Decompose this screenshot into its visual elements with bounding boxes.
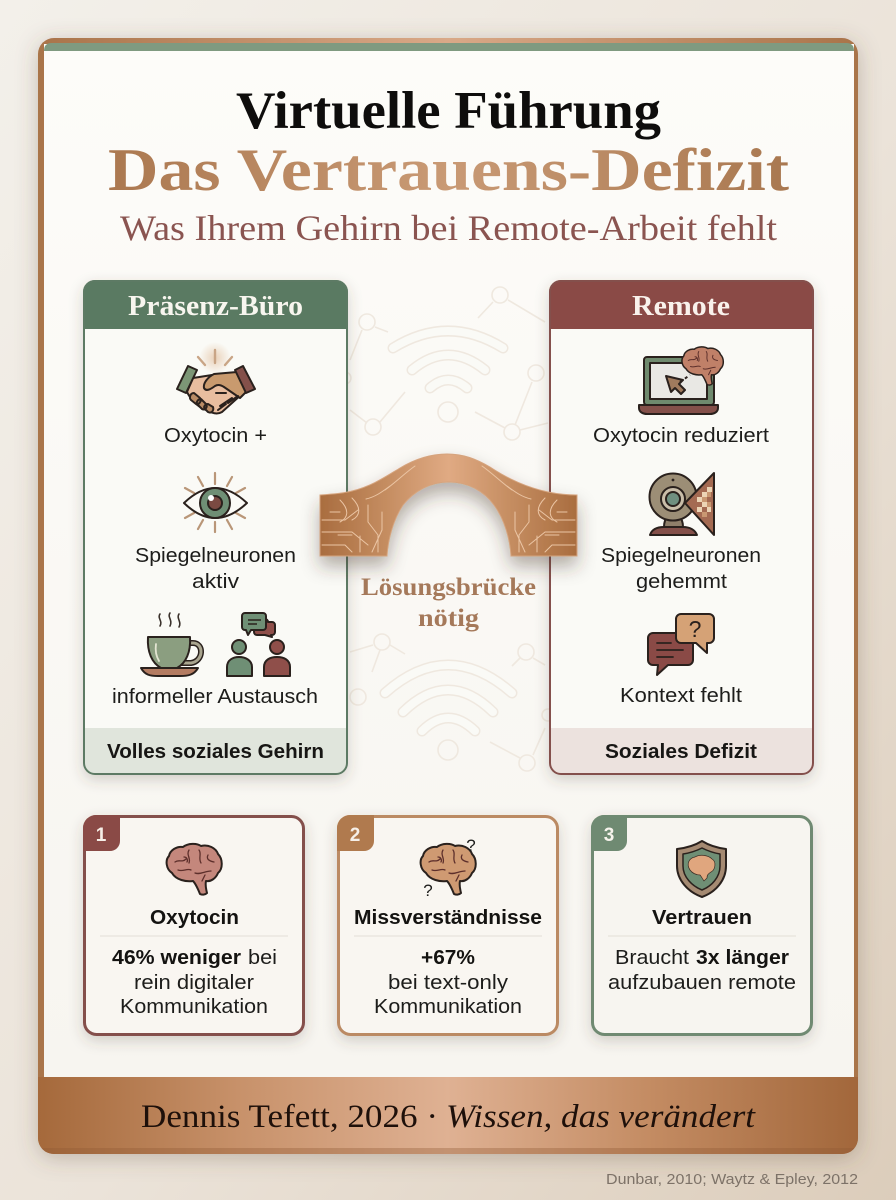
label: Oxytocin reduziert — [593, 424, 769, 447]
card title: Oxytocin — [150, 907, 239, 929]
label: Oxytocin + — [164, 424, 267, 447]
card 3: Vertrauen — [591, 815, 812, 1034]
label: Spiegelneuronen aktiv: Spiegelneuronen — [135, 544, 296, 567]
panel heading: Remote — [632, 291, 730, 322]
card text: Kommunikation — [120, 995, 268, 1018]
icon: copper bridge with circuit traces — [320, 454, 577, 556]
card text — [374, 947, 522, 1018]
icon: chat bubbles with question mark: ? — [689, 616, 701, 642]
icon: coffee cup — [141, 613, 201, 676]
card text: 3x länger — [696, 947, 789, 969]
label: Kontext fehlt — [620, 684, 742, 707]
title block — [108, 82, 789, 248]
footer text: Wissen, das verändert — [446, 1099, 756, 1135]
card title: Missverständnisse — [354, 907, 542, 929]
icon: brain with question marks: ? — [466, 836, 476, 855]
card text: bei text-only — [388, 971, 509, 994]
title line 2: Das Vertrauens-Defizit — [108, 137, 789, 203]
badge 1: 1 — [96, 825, 107, 846]
label: informeller Austausch — [112, 685, 318, 708]
icon: webcam with pixelated cone — [650, 473, 714, 535]
icon: two people talking — [227, 613, 290, 676]
card text: Kommunikation — [374, 995, 522, 1018]
card text: aufzubauen remote — [608, 971, 796, 994]
label: Lösungsbrücke nötig: Lösungsbrücke — [361, 574, 536, 601]
footer text: Dennis Tefett, 2026 · — [141, 1099, 438, 1135]
card text: +67% — [421, 947, 475, 969]
footer banner — [38, 1077, 858, 1154]
card text: rein digitaler — [134, 971, 254, 994]
badge 2 — [337, 815, 374, 851]
icon: eye — [184, 473, 247, 532]
card text: 46% weniger — [112, 947, 241, 969]
panel heading: Präsenz-Büro — [128, 291, 303, 322]
label: Spiegelneuronen gehemmt: gehemmt — [636, 570, 727, 593]
label: Spiegelneuronen gehemmt: Spiegelneuronen — [601, 544, 761, 567]
icon: laptop with brain — [639, 347, 723, 414]
badge 3 — [591, 815, 627, 851]
panel: Remote — [549, 280, 814, 775]
card text: Braucht — [615, 946, 689, 969]
badge 3: 3 — [604, 825, 614, 846]
card 1: Oxytocin — [83, 815, 304, 1034]
card text — [608, 946, 796, 994]
background network and wifi motif — [339, 287, 554, 771]
label: Spiegelneuronen aktiv — [135, 544, 296, 593]
card title: Vertrauen — [652, 907, 752, 929]
card 2: Missverständnisse — [337, 815, 558, 1034]
footer text — [141, 1099, 756, 1135]
icon: brain with question marks — [421, 836, 476, 900]
badge 2: 2 — [350, 825, 360, 846]
icon: chat bubbles with question mark — [648, 614, 714, 675]
panel footer: Volles soziales Gehirn — [107, 741, 324, 763]
card text: bei — [248, 946, 277, 969]
panel: Präsenz-Büro — [83, 280, 348, 775]
citation: Dunbar, 2010; Waytz & Epley, 2012 — [606, 1172, 858, 1188]
label: Lösungsbrücke nötig: nötig — [418, 605, 480, 632]
subtitle: Was Ihrem Gehirn bei Remote-Arbeit fehlt — [120, 208, 777, 248]
icon: handshake — [177, 342, 255, 413]
card text — [112, 946, 277, 1018]
label: Spiegelneuronen gehemmt — [601, 544, 761, 593]
label: Lösungsbrücke nötig — [361, 574, 536, 632]
label: Spiegelneuronen aktiv: aktiv — [192, 570, 240, 593]
icon: shield with brain — [677, 841, 726, 897]
icon: brain with question marks: ? — [423, 881, 433, 900]
badge 1 — [83, 815, 120, 851]
panel footer: Soziales Defizit — [605, 741, 757, 763]
title line 1: Virtuelle Führung — [236, 82, 661, 140]
icon: brain — [167, 844, 222, 895]
